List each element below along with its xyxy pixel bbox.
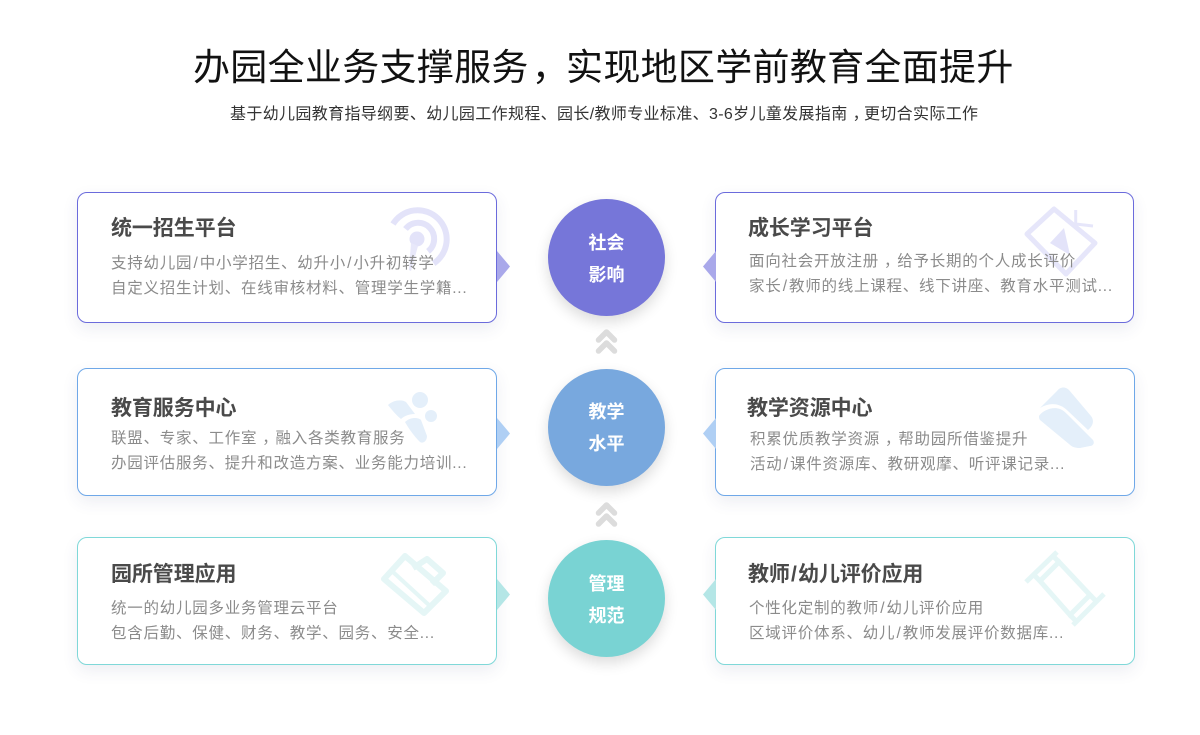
arrow: left pointer (703, 579, 716, 610)
panel: 教育服务中心 (76, 368, 498, 502)
arrow: double chevron up (596, 329, 618, 354)
card heading: 统一招生平台 (111, 217, 236, 240)
circle: 管理规范 (548, 540, 665, 657)
icon: briefcase (381, 553, 449, 616)
subtitle: 基于幼儿园教育指导纲要、幼儿园工作规程、园长/教师专业标准、3-6岁儿童发展指南 ，更切合实际工作 (230, 106, 978, 123)
card heading: 教学资源中心 (747, 397, 872, 420)
card heading: 教师/幼儿评价应用 (748, 563, 923, 586)
card text: 活动/课件资源库、教研观摩、听评课记录... (750, 456, 1065, 473)
circle: 社会影响 (548, 199, 665, 316)
circle: 教学水平: 教学 (588, 402, 624, 422)
arrow: left pointer (703, 418, 716, 449)
card text: 家长/教师的线上课程、线下讲座、教育水平测试... (749, 278, 1113, 295)
panel: 成长学习平台 (714, 192, 1134, 330)
card text: 积累优质教学资源 ，帮助园所借鉴提升 (750, 431, 1028, 448)
card text: 包含后勤、保健、财务、教学、园务、安全... (111, 625, 435, 642)
icon: frame (1024, 550, 1106, 626)
card heading: 教育服务中心 (111, 397, 236, 420)
circle: 社会影响: 社会 (588, 233, 624, 253)
card text: 支持幼儿园/中小学招生、幼升小/小升初转学 (111, 255, 435, 272)
arrow: right pointer (497, 418, 510, 449)
card text: 自定义招生计划、在线审核材料、管理学生学籍... (111, 280, 467, 297)
circle: 教学水平 (548, 369, 665, 486)
arrow: right pointer (497, 251, 510, 282)
circle: 管理规范: 规范 (588, 606, 624, 626)
icon: folder (1039, 388, 1094, 448)
title: 办园全业务支撑服务，实现地区学前教育全面提升 (193, 47, 1014, 88)
card text: 区域评价体系、幼儿/教师发展评价数据库... (749, 625, 1064, 642)
card text: 统一的幼儿园多业务管理云平台 (111, 600, 339, 617)
card heading: 成长学习平台 (748, 217, 873, 240)
arrow: right pointer (497, 579, 510, 610)
panel: 教师/幼儿评价应用 (714, 537, 1136, 672)
card text: 办园评估服务、提升和改造方案、业务能力培训... (111, 455, 467, 472)
icon: video (1024, 206, 1098, 276)
circle: 社会影响: 影响 (588, 265, 624, 285)
panel: 统一招生平台 (76, 192, 498, 330)
circle: 管理规范: 管理 (588, 574, 624, 594)
card text: 个性化定制的教师/幼儿评价应用 (749, 600, 984, 617)
card text: 联盟、专家、工作室 ，融入各类教育服务 (111, 430, 406, 447)
arrow: left pointer (703, 251, 716, 282)
panel: 园所管理应用 (76, 537, 498, 672)
icon: signal (390, 207, 450, 271)
arrow: double chevron up (596, 502, 618, 527)
card text: 面向社会开放注册 ，给予长期的个人成长评价 (749, 253, 1076, 270)
panel: 教学资源中心 (714, 368, 1136, 502)
circle: 教学水平: 水平 (588, 434, 624, 454)
card heading: 园所管理应用 (111, 563, 236, 586)
icon: people (388, 392, 437, 442)
